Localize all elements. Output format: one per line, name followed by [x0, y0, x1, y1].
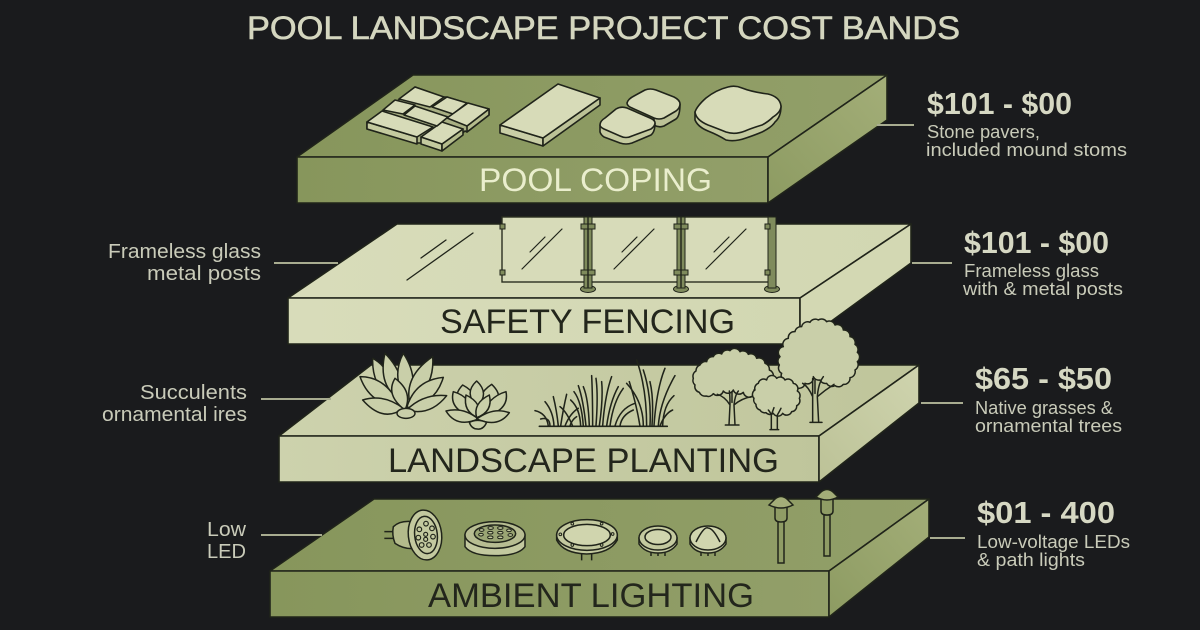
callout: planting price — [921, 361, 1122, 436]
callout: lighting price — [930, 495, 1130, 570]
panel: landscape planting slab — [279, 319, 919, 482]
callout: lighting left note — [207, 519, 322, 563]
heading: pool coping: POOL COPING — [479, 162, 712, 198]
callout: safety fencing price — [912, 225, 1123, 299]
icon: natural stone paver — [695, 86, 781, 141]
heading: ambient lighting: AMBIENT LIGHTING — [428, 577, 754, 615]
panel: pool coping slab — [297, 75, 887, 203]
icon: brick pavers — [367, 87, 489, 151]
callout: lighting price: Low-voltage LEDs — [977, 531, 1130, 552]
callout: lighting left note: Low — [207, 519, 247, 541]
callout: pool coping price — [877, 86, 1127, 160]
icon: LED spot lamp — [384, 508, 444, 562]
icon: large slab paver — [500, 84, 600, 146]
icon: path lights — [769, 490, 838, 563]
callout: lighting left note: LED — [207, 541, 246, 563]
callout: planting left note — [102, 382, 331, 426]
callout: lighting price: & path lights — [977, 549, 1085, 570]
icon: rosette succulent — [446, 381, 509, 429]
icon: ornamental grasses — [535, 360, 675, 426]
heading: landscape planting: LANDSCAPE PLANTING — [388, 442, 779, 480]
callout: planting price: $65 - $50 — [975, 361, 1112, 396]
icon: tumbled pavers — [600, 89, 680, 144]
icon: glass glare on slab — [407, 233, 473, 280]
callout: pool coping price: included mound stoms — [926, 139, 1127, 160]
callout: safety fencing left note — [108, 241, 338, 285]
icon: LED ring light — [557, 520, 617, 560]
icon: ornamental trees — [693, 319, 860, 430]
title: POOL LANDSCAPE PROJECT COST BANDS — [247, 10, 960, 46]
callout: planting price: Native grasses & — [975, 397, 1114, 418]
callout: pool coping price: $101 - $00 — [927, 86, 1072, 121]
icon: frameless glass fence — [500, 217, 780, 292]
callout: safety fencing price: Frameless glass — [964, 260, 1099, 281]
panel: safety fencing slab — [288, 217, 911, 344]
callout: pool coping price: Stone pavers, — [927, 121, 1040, 142]
icon: LED puck light — [465, 522, 525, 556]
panel: ambient lighting slab — [270, 490, 929, 617]
icon: small round lights — [639, 526, 726, 556]
callout: planting price: ornamental trees — [975, 415, 1122, 436]
callout: planting left note: ornamental ires — [102, 404, 247, 426]
icon: agave succulent — [360, 353, 447, 418]
callout: safety fencing price: $101 - $00 — [964, 225, 1109, 260]
callout: safety fencing left note: metal posts — [147, 263, 261, 285]
heading: safety fencing: SAFETY FENCING — [440, 303, 735, 341]
callout: lighting price: $01 - 400 — [977, 495, 1115, 530]
callout: safety fencing left note: Frameless glass — [108, 241, 261, 263]
callout: planting left note: Succulents — [140, 382, 247, 404]
callout: safety fencing price: with & metal posts — [962, 278, 1123, 299]
